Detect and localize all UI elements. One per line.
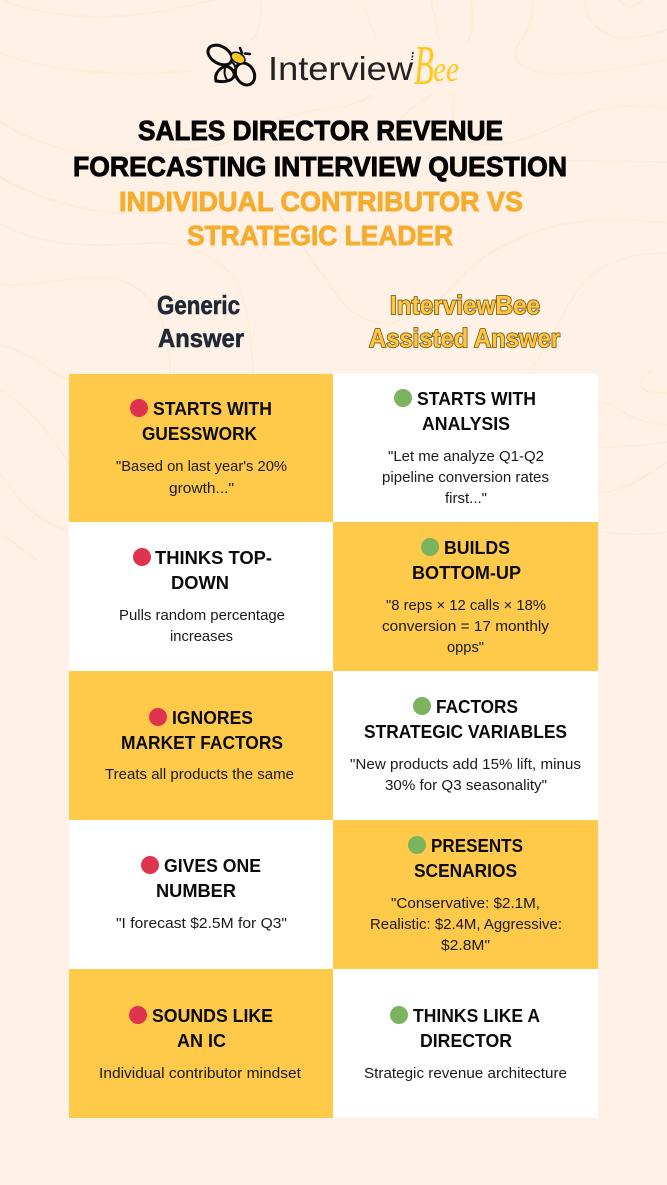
- row 3 assisted: factors strategic variables: "New products add 15% lift, minus: [350, 757, 581, 773]
- title: INDIVIDUAL CONTRIBUTOR VS: [119, 186, 523, 217]
- logo accent letter: B: [414, 35, 434, 97]
- row 5 generic: sounds like an IC: Individual contributor mindset: [99, 1066, 301, 1082]
- row 5 assisted: thinks like a director: Strategic revenue architecture: [364, 1066, 567, 1082]
- row 1 assisted: starts with analysis: pipeline conversion rates: [382, 470, 549, 486]
- column heading: InterviewBee assisted answer: InterviewBee: [390, 290, 540, 320]
- row 4 generic: gives one number: NUMBER: [156, 881, 236, 901]
- row 1 assisted: starts with analysis: [382, 389, 549, 507]
- row 5 assisted: thinks like a director: DIRECTOR: [420, 1031, 512, 1051]
- column heading: generic answer: Answer: [158, 323, 244, 353]
- title: [73, 115, 567, 251]
- row 4 generic: gives one number: "I forecast $2.5M for Q3": [116, 916, 287, 932]
- row 1 generic: starts with guesswork: GUESSWORK: [142, 424, 257, 444]
- column heading: InterviewBee assisted answer: [369, 290, 560, 353]
- row 4 assisted: presents scenarios: PRESENTS: [431, 836, 523, 856]
- column heading: InterviewBee assisted answer: Assisted Answer: [369, 323, 560, 353]
- row 3 assisted: factors strategic variables: 30% for Q3 seasonality": [385, 778, 547, 794]
- row 3 generic: ignores market factors: IGNORES: [172, 708, 253, 728]
- row 5 assisted: thinks like a director: [364, 1006, 567, 1082]
- column heading: generic answer: [157, 290, 244, 353]
- row 2 assisted: builds bottom-up: [333, 522, 598, 671]
- row 5 assisted: thinks like a director: THINKS LIKE A: [413, 1006, 540, 1026]
- row 3 assisted: factors strategic variables: [350, 697, 581, 794]
- row 2 generic: thinks top-down: Pulls random percentage: [119, 608, 285, 624]
- title: STRATEGIC LEADER: [187, 220, 453, 251]
- row 5 generic: sounds like an IC: [69, 969, 333, 1118]
- row 4 generic: gives one number: GIVES ONE: [164, 856, 261, 876]
- row 3 assisted: factors strategic variables: FACTORS: [436, 697, 518, 717]
- row 4 assisted: presents scenarios: Realistic: $2.4M, Aggressive:: [370, 917, 562, 933]
- row 4 assisted: presents scenarios: "Conservative: $2.1M,: [391, 896, 540, 912]
- row 4 assisted: presents scenarios: $2.8M": [441, 938, 490, 954]
- row 1 generic: starts with guesswork: growth...": [169, 481, 234, 497]
- comparison table: [69, 374, 598, 1118]
- icon: pen tick: [412, 52, 413, 60]
- row 4 generic: gives one number: [116, 856, 287, 932]
- row 1 assisted: starts with analysis: STARTS WITH: [417, 389, 536, 409]
- row 1 assisted: starts with analysis: "Let me analyze Q1-Q2: [388, 449, 544, 465]
- row 5 generic: sounds like an IC: AN IC: [177, 1031, 226, 1051]
- logo wordmark: Interview: [268, 50, 413, 87]
- row 3 generic: ignores market factors: [69, 671, 333, 820]
- row 1 generic: starts with guesswork: "Based on last year's 20%: [116, 459, 287, 475]
- row 1 generic: starts with guesswork: STARTS WITH: [153, 399, 272, 419]
- row 2 generic: thinks top-down: THINKS TOP-: [155, 548, 272, 568]
- row 1 generic: starts with guesswork: [69, 374, 333, 522]
- column heading: generic answer: Generic: [157, 290, 240, 320]
- row 2 assisted: builds bottom-up: BOTTOM-UP: [412, 563, 521, 583]
- row 3 generic: ignores market factors: Treats all products the same: [105, 767, 294, 783]
- row 3 generic: ignores market factors: MARKET FACTORS: [121, 733, 283, 753]
- row 5 generic: sounds like an IC: SOUNDS LIKE: [152, 1006, 273, 1026]
- title: FORECASTING INTERVIEW QUESTION: [73, 151, 567, 182]
- row 2 assisted: builds bottom-up: "8 reps × 12 calls × 18%: [386, 598, 546, 614]
- title: SALES DIRECTOR REVENUE: [138, 115, 503, 146]
- row 2 assisted: builds bottom-up: opps": [447, 640, 484, 656]
- logo accent letters: ee: [433, 49, 459, 89]
- row 2 generic: thinks top-down: increases: [170, 629, 233, 645]
- row 2 assisted: builds bottom-up: BUILDS: [444, 538, 510, 558]
- row 4 assisted: presents scenarios: [333, 820, 598, 969]
- icon: bee: [204, 41, 259, 88]
- row 4 assisted: presents scenarios: SCENARIOS: [414, 861, 517, 881]
- row 1 assisted: starts with analysis: first...": [445, 491, 487, 507]
- row 2 generic: thinks top-down: DOWN: [171, 573, 229, 593]
- row 3 assisted: factors strategic variables: STRATEGIC VARIABLES: [364, 722, 567, 742]
- logo: [204, 35, 459, 97]
- row 1 assisted: starts with analysis: ANALYSIS: [422, 414, 510, 434]
- row 2 assisted: builds bottom-up: conversion = 17 monthly: [382, 619, 550, 635]
- row 2 generic: thinks top-down: [119, 548, 285, 645]
